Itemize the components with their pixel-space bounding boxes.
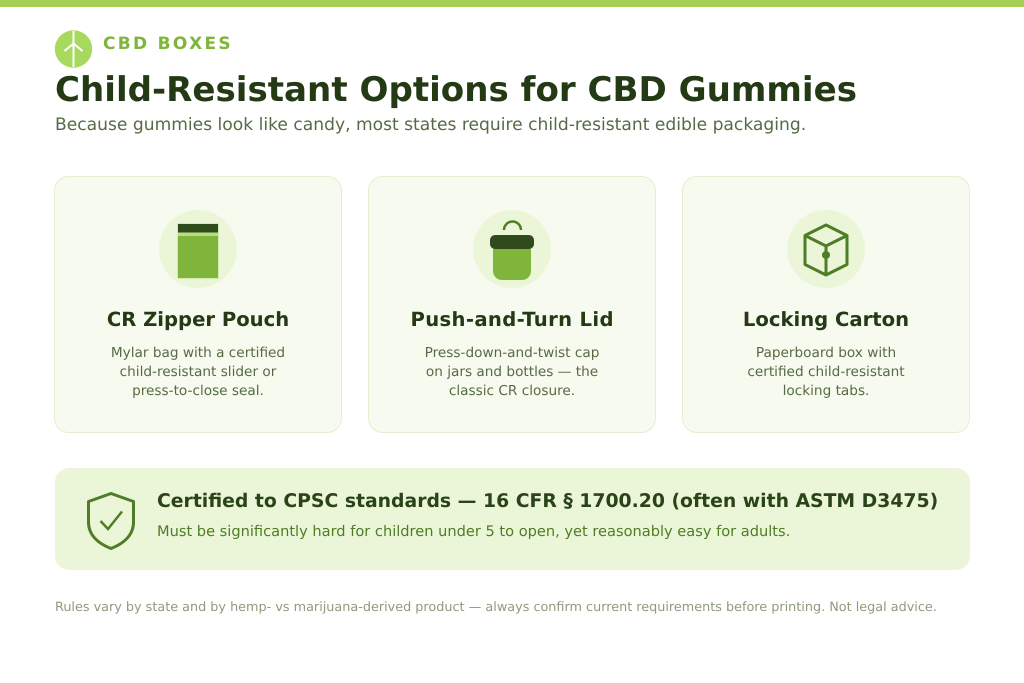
brand logo and name: [55, 30, 233, 68]
footnote: Rules vary by state and by hemp- vs marijuana-derived product — always confirm current requirements before printing. Not legal advice.: [55, 600, 937, 615]
callout: certification: [55, 468, 970, 570]
card description: classic CR closure.: [449, 383, 575, 399]
icon: jar: [473, 210, 551, 288]
icon: shield with check: [88, 494, 134, 548]
panel: CR zipper pouch: [54, 176, 342, 432]
card description: Paperboard box with: [756, 345, 896, 361]
card heading: Push-and-Turn Lid: [410, 308, 614, 331]
icon: pouch: [159, 210, 237, 288]
icon: carton: [787, 210, 865, 288]
top accent bar: [0, 0, 1024, 7]
card description: Mylar bag with a certified: [111, 345, 285, 361]
subtitle: Because gummies look like candy, most states require child-resistant edible packaging.: [55, 115, 806, 135]
card description: child-resistant slider or: [120, 364, 277, 380]
card description: locking tabs.: [783, 383, 869, 399]
card description: press-to-close seal.: [132, 383, 264, 399]
icon: logo: [55, 30, 92, 68]
card description: on jars and bottles — the: [426, 364, 598, 380]
card description: Press-down-and-twist cap: [425, 345, 599, 361]
card heading: CR Zipper Pouch: [107, 308, 289, 331]
card description: [111, 345, 285, 399]
callout text: Must be significantly hard for children under 5 to open, yet reasonably easy for adults.: [157, 523, 790, 540]
brand name: CBD BOXES: [103, 34, 233, 54]
panel: push-and-turn lid: [368, 176, 656, 432]
card description: certified child-resistant: [747, 364, 905, 380]
card description: [747, 345, 905, 399]
callout heading: Certified to CPSC standards — 16 CFR § 1700.20 (often with ASTM D3475): [157, 491, 938, 512]
panel: locking carton: [682, 176, 970, 432]
title: Child-Resistant Options for CBD Gummies: [55, 70, 857, 110]
card heading: Locking Carton: [743, 308, 909, 331]
card description: [425, 345, 599, 399]
